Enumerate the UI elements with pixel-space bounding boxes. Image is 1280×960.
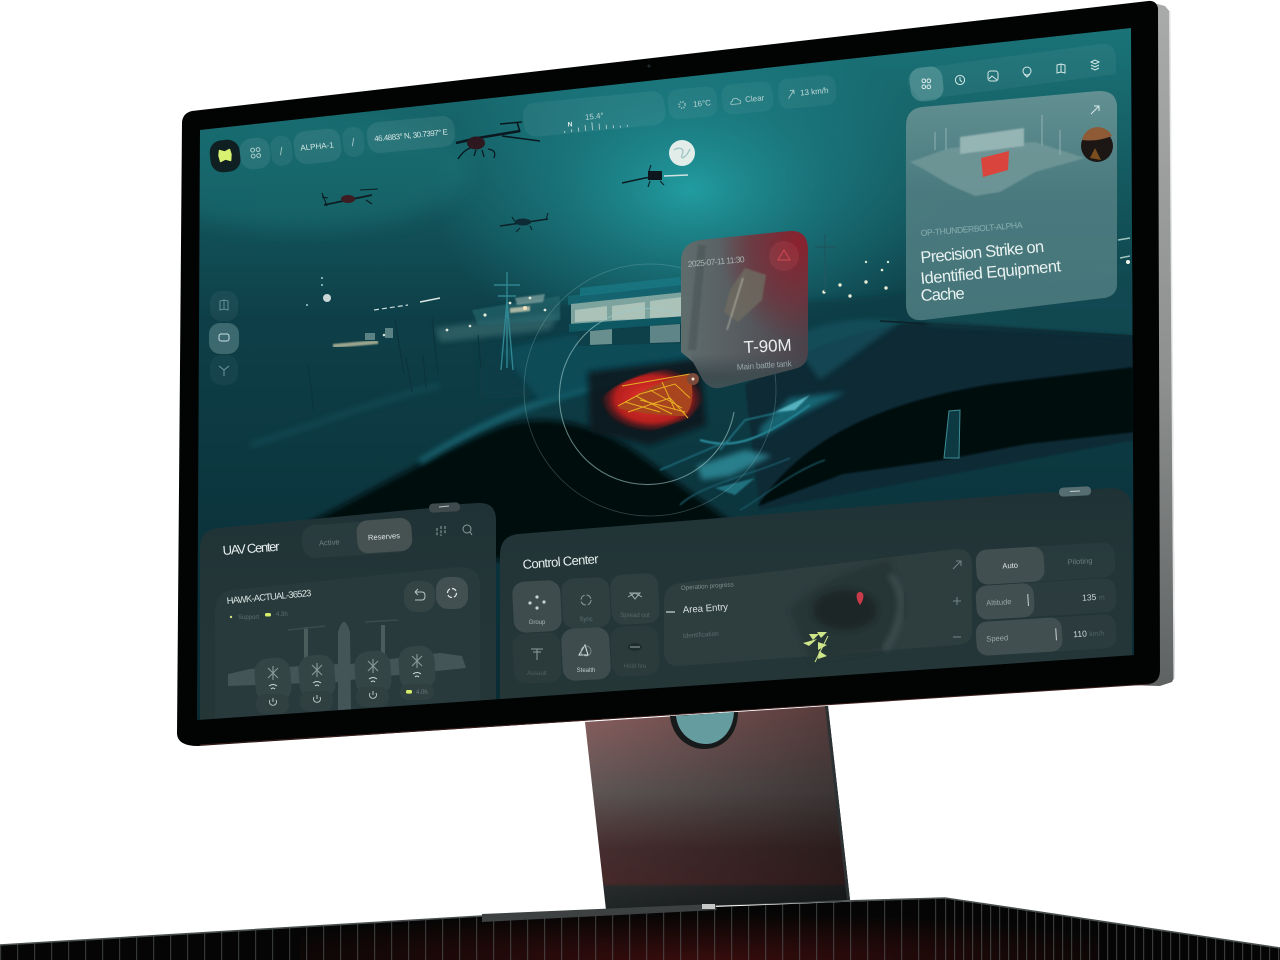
- compass: N: [567, 121, 573, 129]
- tile: Sync: Sync: [579, 617, 593, 623]
- pod 3: [354, 650, 392, 696]
- tile: Stealth: [561, 627, 611, 681]
- fence poles: [308, 318, 481, 412]
- tile: Stealth: Stealth: [577, 668, 595, 674]
- speed slider: Speed: [986, 633, 1008, 644]
- weather: sky condition: [722, 82, 773, 114]
- moon: [669, 140, 695, 166]
- tile: Spread out: Spread out: [620, 613, 650, 619]
- status: 4.3h: [276, 612, 288, 618]
- weather: sky condition: Clear: [745, 93, 765, 104]
- tank designation: T-90M: [743, 336, 792, 357]
- monitor body: [177, 1, 1175, 746]
- rail button: map: [210, 291, 238, 321]
- rail button: camera active: [209, 323, 239, 354]
- pod 4: [398, 645, 436, 691]
- map arrow: [953, 561, 961, 569]
- drag handle: [1059, 486, 1091, 497]
- panel: Control Center: [500, 486, 1132, 700]
- tabs: Reserves: [368, 531, 400, 542]
- mode selector Auto / Piloting: Auto: [1002, 561, 1018, 571]
- tile: Group: Group: [529, 620, 546, 626]
- top bar: ALPHA-1: ALPHA-1: [300, 140, 335, 153]
- top bar: separator: [342, 127, 364, 157]
- operation code: OP-THUNDERBOLT-ALPHA: [920, 220, 1023, 238]
- top bar: separator: [270, 136, 292, 166]
- top bar: grid button: [240, 138, 270, 170]
- weather: temperature: 16°C: [693, 98, 712, 109]
- zoom in: [953, 597, 961, 605]
- tabs: [301, 517, 413, 559]
- tile: Sync: [561, 577, 611, 629]
- 3D site model: [910, 115, 1085, 196]
- night scene background: [130, 20, 1140, 730]
- battery: 4.0h: [416, 690, 428, 696]
- progress labels: Operation progress: [681, 581, 734, 592]
- icon: grid: [922, 79, 931, 89]
- operation title: Precision Strike on: [920, 238, 1045, 267]
- speed slider: 110 km/h: [1073, 627, 1105, 639]
- top bar: ALPHA-1: [293, 128, 343, 165]
- left tool rail: [209, 291, 239, 385]
- compass: 15.4°: [585, 111, 604, 122]
- desk base with ribbed surface: [0, 897, 1280, 960]
- operation title: [920, 238, 1062, 305]
- mission map: [664, 549, 972, 666]
- mode selector Auto / Piloting: [975, 542, 1116, 585]
- panel: UAV Center: [200, 502, 496, 725]
- icon: pin: [1023, 67, 1031, 77]
- mission map: Area Entry: [682, 602, 729, 616]
- heading: Control Center: [522, 551, 600, 572]
- altitude slider: 135 m: [1082, 591, 1105, 603]
- tile: Group: [512, 580, 562, 633]
- rail button: network: [210, 355, 238, 385]
- flag waypoints: [803, 632, 828, 662]
- icon: history: [955, 75, 965, 85]
- drone left: [322, 189, 378, 206]
- top bar: coordinates: [366, 115, 456, 154]
- tile: Hold: [610, 625, 660, 677]
- operation card: [906, 91, 1117, 320]
- target card T-90M: [681, 231, 808, 388]
- teal light streaks on terrain: [660, 405, 825, 510]
- pod 2: [298, 654, 336, 700]
- power buttons: [256, 687, 389, 714]
- icon: layers: [1091, 60, 1099, 70]
- operation title: Identified Equipment: [920, 257, 1062, 288]
- arrow link: [1091, 106, 1099, 114]
- drag handle: [429, 502, 460, 513]
- dark hill left: [295, 420, 735, 560]
- tile: Spread out: [610, 573, 660, 625]
- warning icon: [769, 241, 799, 271]
- timestamp: 2025-07-11 11:30: [687, 254, 745, 269]
- top bar: coordinates: 46.4883° N, 30.7397° E: [374, 127, 448, 144]
- drone large: [456, 122, 540, 159]
- icon: map: [1057, 64, 1065, 73]
- operation title: Cache: [920, 285, 965, 305]
- monitor stand neck: [585, 706, 850, 910]
- icon: search: [463, 525, 472, 535]
- aircraft silhouette: [228, 620, 466, 710]
- weather: wind: [778, 76, 836, 108]
- status: Support: [238, 615, 259, 621]
- battery: [400, 684, 434, 700]
- altitude slider: [975, 578, 1117, 620]
- compass: [522, 90, 666, 138]
- zoom out: [953, 636, 961, 638]
- mode tiles: [512, 573, 660, 684]
- screen: [130, 20, 1140, 730]
- heading: UAV Center: [222, 539, 281, 558]
- icon: filter: [437, 526, 445, 536]
- tile: Assault: Assault: [527, 671, 547, 677]
- mission map: Identification: [683, 630, 719, 640]
- building: [568, 277, 690, 346]
- mode selector Auto / Piloting: Piloting: [1067, 556, 1093, 567]
- thumbnail: [1081, 127, 1113, 162]
- thermal target heat signature: [588, 358, 706, 445]
- radar rings: [524, 264, 776, 516]
- tile: Hold: Hold fire: [624, 664, 647, 670]
- return button: [404, 581, 435, 612]
- altitude slider: Altitude: [986, 597, 1012, 608]
- pylons: [494, 234, 960, 458]
- right hills: [745, 321, 1135, 510]
- tabs: Active: [319, 537, 340, 548]
- dock bar on base: [482, 904, 717, 922]
- top right icon toolbar: [908, 44, 1116, 103]
- pod 1: [254, 657, 292, 703]
- top bar: logo: [210, 140, 240, 172]
- tank description: Main battle tank: [736, 358, 793, 372]
- top bar: separator: /: [351, 137, 356, 149]
- stand cut-out showing teal: [670, 712, 738, 749]
- sync button: [436, 577, 468, 609]
- target pin: [857, 592, 863, 605]
- weather: temperature: [668, 87, 717, 119]
- card: HAWK: [215, 567, 480, 725]
- top bar: separator: /: [279, 146, 284, 158]
- drone pods: [254, 645, 436, 703]
- designation: HAWK-ACTUAL-36523: [226, 587, 312, 606]
- drone right: [622, 165, 688, 187]
- town lights: [306, 238, 1130, 346]
- icon: image: [988, 71, 998, 81]
- speed slider: [975, 614, 1117, 656]
- drone center: [500, 213, 548, 232]
- status: [230, 612, 288, 621]
- weather: wind: 13 km/h: [800, 86, 829, 98]
- tile: Assault: [512, 632, 562, 684]
- tank crew photo: [692, 245, 766, 350]
